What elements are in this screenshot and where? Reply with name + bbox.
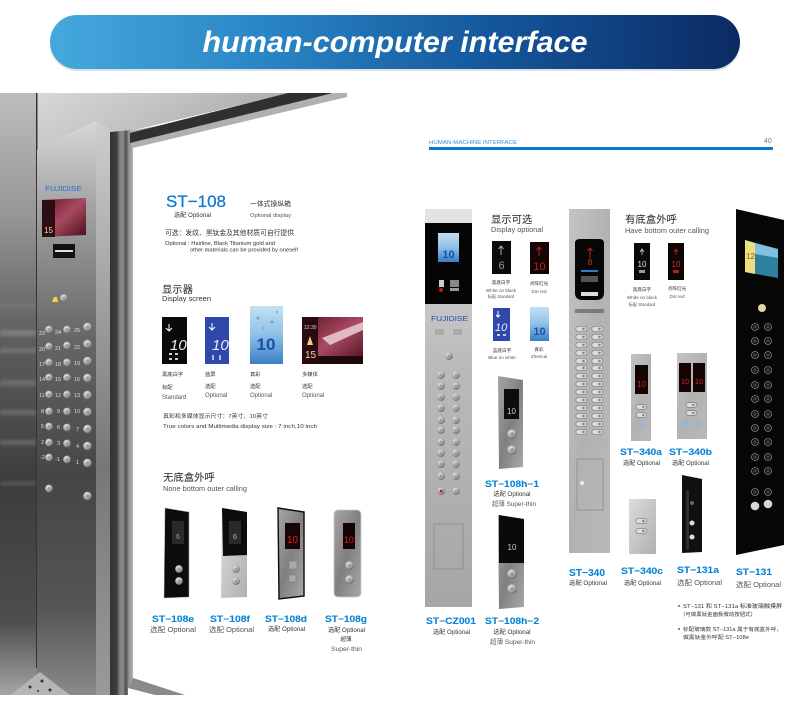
product heading ST-108: Optional display <box>250 213 291 219</box>
display option labels: 黑底白字 <box>492 279 511 286</box>
display: multimedia: 15 <box>305 350 317 361</box>
labels: ST-340c, ST-131a, ST-131: ST−340c <box>621 566 663 577</box>
labels: none bottom outer calling models: ST−108f <box>210 614 251 624</box>
floor buttons: 11 <box>39 393 45 399</box>
door frame <box>110 130 133 695</box>
floor buttons: 6 <box>57 425 60 431</box>
label: ST-340: 选配 Optional <box>569 579 607 587</box>
floor buttons: 7 <box>76 427 79 433</box>
right page header: HUMAN-MACHINE INTERFACE <box>429 140 517 146</box>
panel card slot <box>53 244 75 258</box>
labels: ST-340a and ST-340b <box>620 447 712 467</box>
display option: true colour: 10 <box>533 326 546 338</box>
footnotes <box>678 602 783 641</box>
display labels: Standard <box>162 395 186 401</box>
alarm button <box>52 294 68 302</box>
labels: ST-340c, ST-131a, ST-131: ST−131 <box>736 567 773 578</box>
labels: ST-340c, ST-131a, ST-131 <box>621 565 781 589</box>
heading: have bottom outer calling: Have bottom outer calling <box>625 228 709 235</box>
display size note: 真彩和多媒体显示尺寸：7英寸、10英寸 <box>163 412 268 420</box>
floor buttons: 18 <box>55 362 61 368</box>
heading: display optional: Display optional <box>491 227 543 234</box>
heading: none bottom outer calling: 无底盒外呼 <box>163 471 215 484</box>
labels: ST-340c, ST-131a, ST-131: 选配 Optional <box>677 578 722 587</box>
display labels: Optional <box>302 393 324 399</box>
floor buttons: 14 <box>39 377 45 383</box>
display size note <box>163 412 317 430</box>
labels: ST-340c, ST-131a, ST-131: ST−131a <box>677 565 720 576</box>
product heading ST-108: 一体式操纵箱 <box>250 199 291 208</box>
panel: ST-131 <box>736 209 784 555</box>
multimedia screen: 12 <box>746 252 755 261</box>
display option labels: White on black <box>486 288 517 293</box>
footnotes: 做黑钛金外呼配 ST−108e <box>683 633 749 641</box>
labels: ST-108h-1 <box>485 479 539 508</box>
footnotes: ST−131 和 ST−131a 标准玻璃触摸屏 <box>683 602 783 610</box>
service door <box>577 459 603 510</box>
outer display labels: 标配 Standard <box>629 301 656 308</box>
panel: ST-340b: 10 <box>695 377 703 386</box>
display: multimedia: 12:30 <box>304 325 317 331</box>
call buttons <box>751 502 759 510</box>
display option labels: 点阵红光 <box>530 280 549 287</box>
panel: ST-108h-1: 10 <box>507 407 516 416</box>
display: true colour: 10 <box>257 335 275 354</box>
outer display labels: Dot red <box>669 294 685 299</box>
display: black <box>162 317 187 364</box>
display labels: 选配 <box>250 382 261 390</box>
labels: none bottom outer calling models: 超薄 <box>340 635 352 643</box>
panel: ST-108g: 10 <box>344 535 354 545</box>
labels: none bottom outer calling models: ST−108d <box>265 614 307 624</box>
panel: ST-340 <box>569 209 610 553</box>
material options text: 可选：发纹、黑钛金及其他材质可自行提供 <box>165 228 294 237</box>
right page header <box>429 138 773 150</box>
outer display: white on black: 10 <box>638 260 647 269</box>
labels: ST-108h-2 and ST-CZ001 <box>426 616 539 646</box>
panel: ST-108e: 6 <box>176 534 180 541</box>
labels: none bottom outer calling models: 选配 Optional <box>150 625 196 634</box>
label: ST-340 <box>569 568 607 587</box>
outer display: dot red <box>668 243 684 280</box>
labels: ST-108h-2 and ST-CZ001: 选配 Optional <box>433 628 470 636</box>
panel: ST-340a <box>631 354 651 441</box>
display option: true colour <box>530 307 549 341</box>
logo: FUJIDISE <box>431 314 468 323</box>
labels: none bottom outer calling models: ST−108g <box>325 614 367 624</box>
display labels: 真彩 <box>250 370 261 378</box>
display: blue: 10 <box>212 337 229 354</box>
display option labels: Zhencai <box>531 354 547 359</box>
buttons <box>437 352 460 495</box>
labels: ST-340a and ST-340b: ST−340a <box>620 447 663 458</box>
display <box>575 239 604 300</box>
outer display labels: White on black <box>627 295 658 300</box>
panel multimedia display <box>42 198 86 237</box>
labels: ST-108h-2 and ST-CZ001: ST−CZ001 <box>426 616 476 626</box>
material options text: Optional : Hairline, Black Titanium gold and <box>165 241 275 247</box>
floor buttons: 8 <box>41 409 44 415</box>
floor buttons: 19 <box>74 361 80 367</box>
panel: ST-108f: 6 <box>233 534 237 541</box>
panel: ST-108f <box>221 508 247 598</box>
product heading ST-108: ST−108 <box>166 192 226 211</box>
heading: none bottom outer calling: None bottom outer calling <box>163 486 247 493</box>
panel: ST-108h-1 <box>498 376 523 469</box>
floor buttons <box>751 323 772 496</box>
floor buttons: 3 <box>57 441 60 447</box>
display option: dot red <box>530 242 549 274</box>
floor buttons: 15 <box>55 377 61 383</box>
display option labels: 蓝底白字 <box>493 347 512 354</box>
floor buttons: 13 <box>74 393 80 399</box>
floor buttons: 22 <box>74 345 80 351</box>
floor buttons: 25 <box>74 328 80 334</box>
display labels: 选配 <box>302 382 313 390</box>
panel: ST-108g <box>334 510 361 597</box>
label: ST-340: ST−340 <box>569 568 605 579</box>
labels: none bottom outer calling models: Super-thin <box>331 647 362 653</box>
banner title: human-computer interface <box>202 26 588 59</box>
heading: display screen <box>162 284 211 303</box>
labels: none bottom outer calling models: 选配 Optional <box>328 626 365 634</box>
outer display labels: 黑底白字 <box>633 286 652 293</box>
floor buttons: 2 <box>41 440 44 446</box>
display option: dot red: 10 <box>533 261 546 273</box>
panel: ST-340b: 10 <box>681 377 689 386</box>
display labels: 多媒体 <box>302 370 319 378</box>
display: multimedia <box>302 317 363 364</box>
screen <box>425 223 472 304</box>
panel logo: FUJIDISE <box>45 184 82 193</box>
heading: none bottom outer calling <box>163 471 247 493</box>
panel: ST-340c <box>629 499 656 554</box>
labels: ST-108h-1: ST−108h−1 <box>485 479 539 489</box>
heading: display optional <box>491 213 543 234</box>
floor buttons: 4 <box>76 444 79 450</box>
service door <box>434 524 463 569</box>
product heading ST-108 <box>166 192 291 219</box>
display option labels <box>486 279 549 360</box>
material options text: other materials can be provided by oneself <box>190 248 299 254</box>
bell button <box>758 304 766 312</box>
display: true colour <box>250 306 283 364</box>
labels: none bottom outer calling models: 选配 Optional <box>268 625 305 633</box>
floor buttons <box>39 323 92 500</box>
screen: 10 <box>442 249 455 261</box>
display labels: Optional <box>205 393 227 399</box>
labels: none bottom outer calling models: ST−108e <box>152 614 194 624</box>
floor buttons: 21 <box>55 346 61 352</box>
floor buttons: -1 <box>55 457 60 463</box>
display labels: 黑底白字 <box>162 370 183 378</box>
display option labels: 真彩 <box>534 346 544 353</box>
elevator cabin photo <box>0 93 347 695</box>
floor buttons: 10 <box>74 409 80 415</box>
floor buttons: -2 <box>40 455 45 461</box>
floor threshold <box>10 672 185 695</box>
heading: have bottom outer calling <box>625 213 709 235</box>
display: 8 <box>588 258 593 267</box>
display option: white on black <box>492 241 511 274</box>
labels: ST-108h-2 and ST-CZ001: ST−108h−2 <box>485 616 539 626</box>
floor buttons: 24 <box>55 330 61 336</box>
floor buttons: 9 <box>57 409 60 415</box>
oval floor buttons <box>576 326 603 435</box>
display labels: 蓝屏 <box>205 370 216 378</box>
display: blue <box>205 317 229 364</box>
heading: display optional: 显示可选 <box>491 213 532 226</box>
display option labels: Dot red <box>531 289 547 294</box>
heading: display screen: 显示器 <box>162 284 193 296</box>
panel: ST-108d: 10 <box>287 535 298 546</box>
display labels: 标配 <box>162 383 173 391</box>
outer display labels <box>627 285 687 308</box>
labels: ST-108h-1: 超薄 Super-thin <box>492 500 536 508</box>
floor buttons: 5 <box>41 424 44 430</box>
labels: ST-108h-2 and ST-CZ001: 超薄 Super-thin <box>490 638 535 646</box>
title banner <box>50 15 740 71</box>
panel: ST-108h-2 <box>498 515 524 609</box>
panel: ST-340a: 10 <box>637 380 646 389</box>
display size note: True colors and Multimedia display size : 7 inch,10 inch <box>163 424 317 430</box>
product heading ST-108: 选配 Optional <box>174 211 211 219</box>
display option labels: Blue on white <box>488 355 516 360</box>
labels: none bottom outer calling models: 选配 Optional <box>209 625 254 634</box>
heading: have bottom outer calling: 有底盒外呼 <box>625 213 677 226</box>
heading: display screen: Display screen <box>162 296 211 303</box>
labels: ST-108h-2 and ST-CZ001: 选配 Optional <box>494 628 530 636</box>
outer display: white on black <box>634 243 650 280</box>
display option: blue on white <box>493 308 510 341</box>
ceiling beam <box>130 93 347 148</box>
labels: ST-340a and ST-340b: 选配 Optional <box>672 459 709 467</box>
panel: ST-340b <box>677 353 707 439</box>
panel: ST-CZ001 <box>425 209 472 607</box>
outer display: dot red: 10 <box>672 260 681 269</box>
display labels: 选配 <box>205 382 216 390</box>
multimedia screen <box>745 240 778 278</box>
display labels <box>162 370 324 401</box>
panel: ST-108h-2: 10 <box>508 543 517 552</box>
floor buttons: 17 <box>39 362 45 368</box>
floor buttons: 12 <box>55 393 61 399</box>
floor buttons: 20 <box>39 347 45 353</box>
labels: ST-108h-1: 选配 Optional <box>494 490 530 498</box>
labels: none bottom outer calling models <box>150 614 367 653</box>
right page header: 40 <box>764 138 772 145</box>
panel: ST-131a <box>682 475 702 553</box>
display labels: Optional <box>250 393 272 399</box>
labels: ST-340c, ST-131a, ST-131: 选配 Optional <box>624 579 661 587</box>
display option: white on black: 6 <box>498 260 505 272</box>
floor buttons: 23 <box>39 331 45 337</box>
panel: ST-108d <box>278 508 304 599</box>
floor buttons: 16 <box>74 377 80 383</box>
panel multimedia display: 15 <box>44 226 53 235</box>
display option labels: 标配 Standard <box>488 293 515 300</box>
material options text <box>165 228 299 254</box>
display option: blue on white: 10 <box>495 322 508 334</box>
labels: ST-340a and ST-340b: 选配 Optional <box>623 459 660 467</box>
panel: ST-108e <box>164 508 189 598</box>
footnotes: （可做黑钛金面板微动按钮式） <box>680 610 756 618</box>
floor buttons: 1 <box>76 460 79 466</box>
labels: ST-340a and ST-340b: ST−340b <box>669 447 712 458</box>
outer display labels: 点阵红光 <box>668 285 687 292</box>
control panel column <box>37 121 110 695</box>
footnotes: 标配玻璃款 ST−131a 属于有底盒外呼， <box>683 625 782 633</box>
display: black: 10 <box>170 337 187 354</box>
labels: ST-340c, ST-131a, ST-131: 选配 Optional <box>736 580 781 589</box>
